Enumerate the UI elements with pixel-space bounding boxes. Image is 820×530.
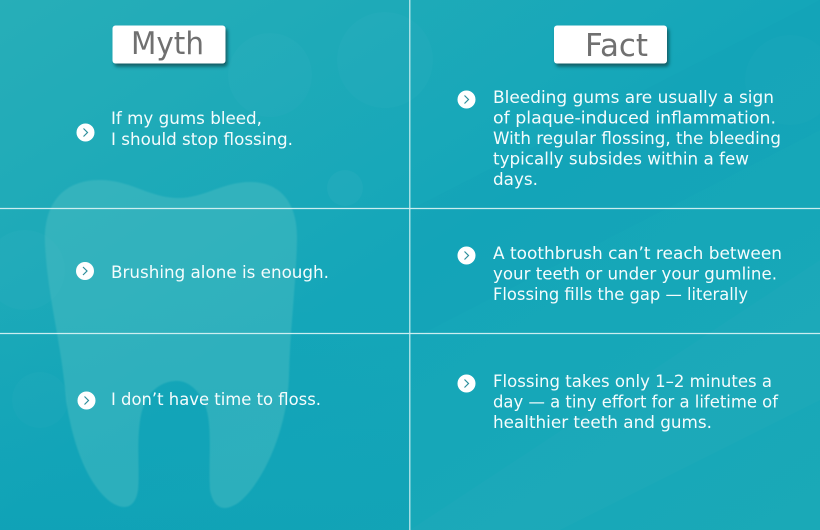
myth 1 text: I should stop flossing. (111, 130, 293, 150)
myth 1 text (111, 109, 293, 150)
icon: bullet arrow (76, 262, 94, 280)
fact 2 text: your teeth or under your gumline. (493, 264, 777, 284)
fact 1 text: Bleeding gums are usually a sign (493, 88, 774, 108)
icon: tooth watermark (45, 180, 297, 508)
myth 2 text: Brushing alone is enough. (111, 263, 329, 283)
heading: Fact (554, 26, 667, 64)
icon: bullet arrow (76, 124, 94, 142)
fact 2 text: Flossing fills the gap — literally (493, 285, 748, 305)
myth 3 text: I don’t have time to floss. (111, 390, 321, 410)
fact 3 (458, 372, 779, 433)
icon: bullet arrow (458, 374, 476, 392)
myth 3 (78, 390, 321, 410)
fact 3 text: Flossing takes only 1–2 minutes a (493, 372, 772, 392)
fact 1 text (493, 88, 781, 190)
fact 1 text: typically subsides within a few (493, 150, 749, 170)
heading: Myth: Myth (131, 26, 204, 62)
fact 1 text: days. (493, 170, 538, 190)
myth 2 (76, 262, 329, 283)
fact 1 text: With regular flossing, the bleeding (493, 129, 781, 149)
fact 2 text (493, 244, 782, 305)
fact 2 (458, 244, 782, 305)
fact 1 (458, 88, 781, 190)
heading: Fact: Fact (585, 28, 648, 64)
myth 1 (76, 109, 293, 150)
icon: bullet arrow (458, 246, 476, 264)
myth 1 text: If my gums bleed, (111, 109, 262, 129)
icon: bullet arrow (458, 90, 476, 108)
fact 3 text: day — a tiny effort for a lifetime of (493, 392, 779, 412)
fact 3 text: healthier teeth and gums. (493, 413, 712, 433)
icon: bullet arrow (78, 392, 96, 410)
fact 3 text (493, 372, 779, 433)
fact 1 text: of plaque-induced inflammation. (493, 108, 776, 128)
fact 2 text: A toothbrush can’t reach between (493, 244, 782, 264)
heading: Myth (112, 26, 226, 64)
